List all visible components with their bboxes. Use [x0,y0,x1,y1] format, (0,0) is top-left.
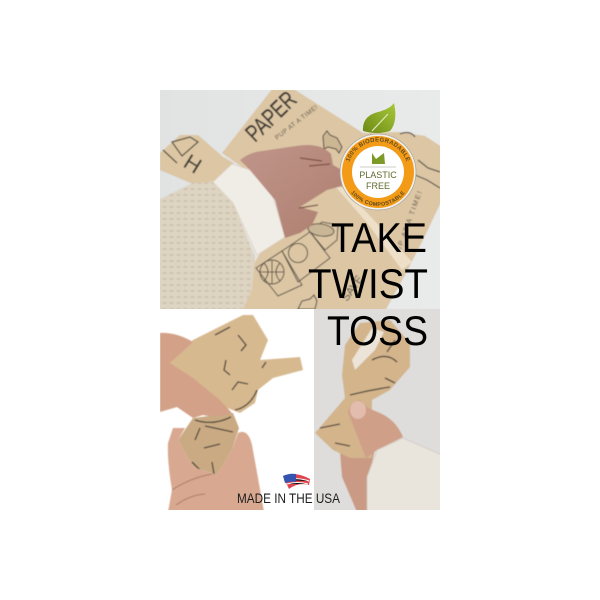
left paper sheet: H [179,149,206,179]
ball print [192,417,233,474]
paper curl under hand [335,186,412,270]
paper print: icon squares [256,222,338,296]
knit sweater sleeve [158,182,255,311]
twisted paper ball [178,413,239,475]
paper print: second tagline: PUP AT A TIME! [393,190,424,259]
photo: take step [158,86,442,311]
upper hand [160,333,232,418]
finger creases [172,474,212,505]
thumbnail [350,401,366,419]
paper print [320,340,397,446]
lower hand [168,428,264,512]
palm [340,448,375,512]
badge label: PLASTIC [359,170,397,180]
heading: take twist toss: TOSS [327,307,428,354]
icon: us flag [283,474,310,489]
photo: toss step [312,307,442,512]
paper print: PAPER: PAPER [240,86,302,147]
heading: take twist toss: TWIST [308,260,428,307]
badge arc text bottom: 100% COMPOSTABLE [351,190,405,206]
paper print: tagline: PUP AT A TIME! [274,104,319,142]
badge icon [372,153,385,164]
icon: leaf [363,103,395,133]
thumb and fingers [348,400,403,458]
towel cuff [213,164,285,255]
twisted paper top [170,315,303,413]
heading: take twist toss [308,214,428,354]
paper print: dog [323,131,342,153]
made in the usa label: MADE IN THE USA [237,491,340,506]
finger shadows [299,158,330,208]
crumpled paper [315,320,410,458]
badge: plastic free [340,134,416,210]
badge: plastic free: FREE [366,181,390,191]
hand [240,145,342,238]
paper print: dog bottom [298,295,317,309]
left paper sheet [160,135,234,184]
paper highlight [352,328,384,370]
towel sleeve [367,438,442,512]
paper top print [215,327,266,410]
paper print: save text: SAVE [340,273,366,304]
paper print: right animal [400,133,440,188]
photo: twist step [160,314,304,510]
paper sheet [222,86,442,311]
heading: take twist toss: TAKE [331,214,427,261]
badge arc text top: 100% BIODEGRADABLE [346,137,410,162]
